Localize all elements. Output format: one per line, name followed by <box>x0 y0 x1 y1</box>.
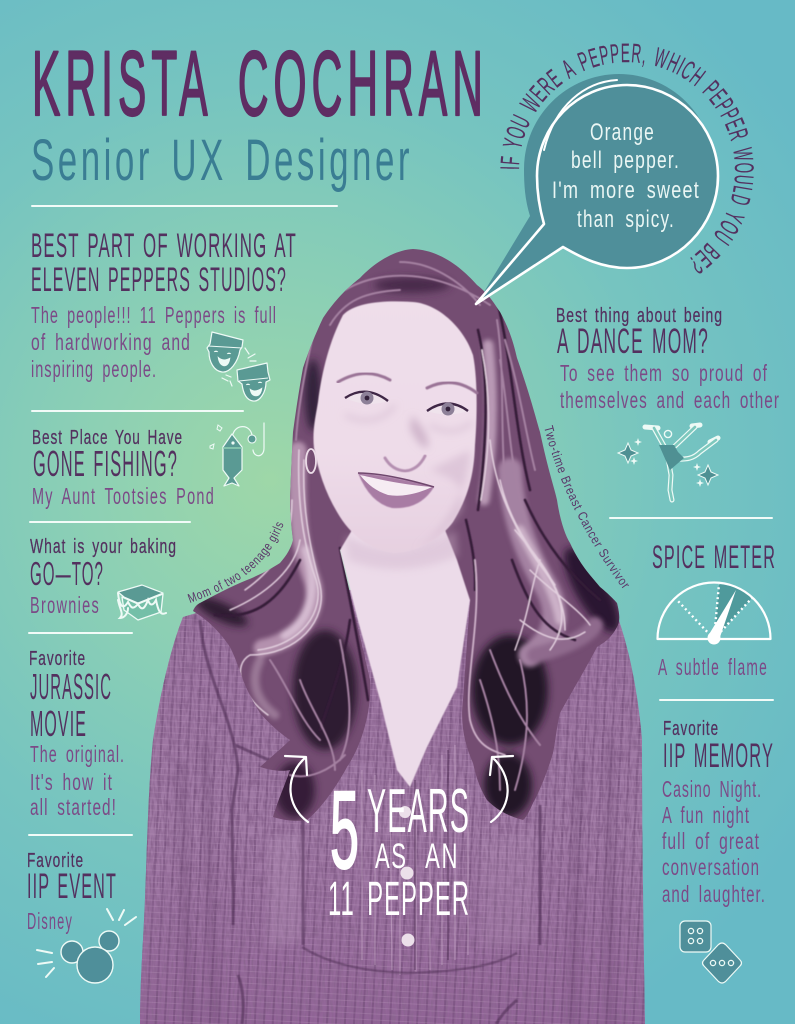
portrait photo <box>140 249 645 1024</box>
panel: baking go-to <box>30 536 177 620</box>
gauge <box>658 582 770 644</box>
caption: mom of two: Mom of two teenage girls <box>188 522 284 603</box>
nose <box>385 456 425 471</box>
hair <box>193 249 630 821</box>
panel: dance mom <box>556 305 780 500</box>
icon: brownie <box>118 585 166 620</box>
right eyebrow <box>427 383 477 393</box>
question: Best thing about being <box>556 305 723 327</box>
speech bubble <box>476 74 718 304</box>
badge: 5 years as an 11 pepper: AS AN <box>375 837 459 876</box>
neck and chest <box>340 530 470 787</box>
answer: inspiring people. <box>31 356 157 382</box>
buttons <box>399 806 414 946</box>
heading: MOVIE <box>30 703 87 744</box>
icon: dancer with sparkles <box>618 425 718 500</box>
answer: The original. <box>30 741 125 767</box>
icon: comedy masks <box>207 332 270 401</box>
answer: The people!!! 11 Peppers is full <box>31 302 277 328</box>
earring <box>306 449 316 473</box>
icon: mouse ears <box>37 909 136 983</box>
answer <box>31 302 277 382</box>
panel: gone fishing <box>32 423 264 509</box>
left eye <box>345 392 388 404</box>
bubble text: than spicy. <box>577 206 675 233</box>
panel: 11P event <box>27 850 136 983</box>
question: What is your baking <box>30 536 177 558</box>
neck shading <box>345 530 458 569</box>
panel: best part of working <box>31 227 297 401</box>
callout: pepper question on arc: IF YOU WERE A PEPPER, WHICH PEPPER WOULD YOU BE? <box>500 44 754 274</box>
bubble text: I'm more sweet <box>552 177 700 204</box>
badge: 5 years as an 11 pepper: 5 <box>330 769 359 892</box>
icon: fish on hook <box>210 423 264 486</box>
answer: A fun night <box>662 802 750 828</box>
answer: Disney <box>27 908 73 934</box>
bubble text: bell pepper. <box>571 147 680 174</box>
panel: 11P memory <box>662 718 774 983</box>
arrow: right <box>490 756 513 822</box>
panel: baking go-to: GO—TO? <box>30 555 104 592</box>
answer: all started! <box>30 794 117 820</box>
right eye <box>427 402 468 416</box>
bubble text: Orange <box>590 119 655 146</box>
bubble text <box>552 119 700 233</box>
subtitle: Senior UX Designer <box>31 128 413 193</box>
arrow: left <box>285 756 308 822</box>
infographic poster: JURASSIC <box>30 666 112 707</box>
answer: My Aunt Tootsies Pond <box>32 483 215 509</box>
infographic poster: BEST PART OF WORKING AT <box>31 227 297 265</box>
panel: jurassic movie <box>29 648 125 820</box>
face shading <box>345 405 472 550</box>
answer <box>30 741 125 820</box>
mouth <box>358 473 434 508</box>
left eyebrow <box>338 373 390 382</box>
badge: 5 years as an 11 pepper <box>285 756 513 926</box>
caption: survivor: Two-time Breast Cancer Survivor <box>544 425 629 588</box>
heading <box>31 227 297 299</box>
answer <box>662 776 766 907</box>
heading <box>30 666 112 744</box>
answer: Brownies <box>30 592 100 618</box>
panel: 11P event: IIP EVENT <box>27 867 117 906</box>
infographic poster: ELEVEN PEPPERS STUDIOS? <box>31 261 287 299</box>
blouse <box>140 590 645 1024</box>
answer: It's how it <box>30 769 113 795</box>
icon: dice <box>680 921 742 983</box>
panel: spice meter <box>652 539 776 680</box>
question: Favorite <box>663 718 719 740</box>
answer: of hardworking and <box>31 329 191 355</box>
panel: gone fishing: GONE FISHING? <box>33 443 178 484</box>
question: Best Place You Have <box>32 427 183 449</box>
badge: 5 years as an 11 pepper: 11 PEPPER <box>328 873 470 926</box>
badge: 5 years as an 11 pepper: YEARS <box>367 777 470 846</box>
question: Favorite <box>27 850 84 872</box>
question: Favorite <box>29 648 86 670</box>
answer <box>560 360 780 413</box>
face <box>313 301 477 553</box>
